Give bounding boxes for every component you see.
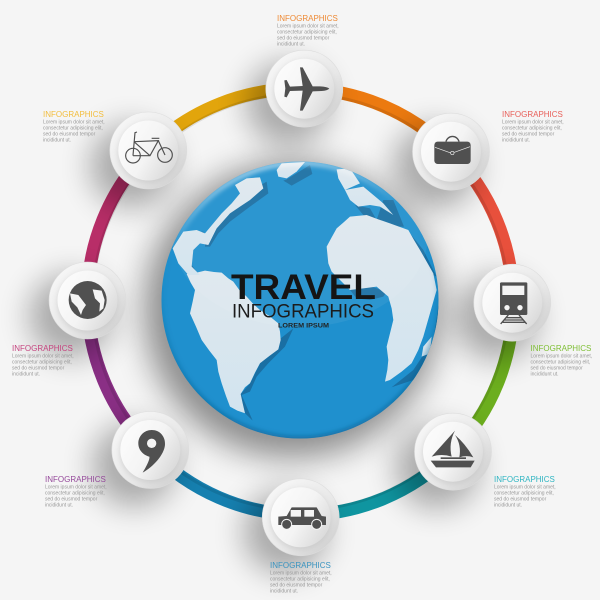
text block: left — [12, 344, 74, 378]
text block: upper right: Lorem ipsum dolor sit amet, — [502, 120, 564, 126]
text block: lower left: incididunt ut. — [45, 502, 73, 508]
madagascar — [422, 337, 432, 357]
text block: upper right — [502, 110, 564, 144]
text block: lower right: incididunt ut. — [494, 502, 522, 508]
text block: lower left — [45, 475, 107, 508]
text block: upper right: INFOGRAPHICS — [502, 110, 563, 119]
text block: bottom: Lorem ipsum dolor sit amet, — [270, 570, 332, 576]
coloured ring — [87, 89, 513, 515]
text block: upper left: incididunt ut. — [43, 138, 71, 144]
text block: upper left: consectetur adipisicing elit, — [43, 126, 103, 132]
europe — [337, 168, 393, 215]
text block: bottom: sed do eiusmod tempor — [270, 582, 323, 588]
globe shadow — [144, 162, 440, 458]
text block: right: INFOGRAPHICS — [530, 344, 591, 353]
text block: lower left: INFOGRAPHICS — [45, 475, 106, 484]
globe title: TRAVEL — [231, 268, 376, 307]
text block: upper left: sed do eiusmod tempor — [43, 132, 96, 138]
text block: right: consectetur adipisicing elit, — [530, 360, 590, 366]
africa — [327, 215, 437, 382]
icon: train — [500, 282, 527, 324]
node: world — [49, 262, 126, 339]
text block: upper right: incididunt ut. — [502, 138, 530, 144]
globe land — [173, 162, 437, 413]
text block: left: INFOGRAPHICS — [12, 344, 73, 353]
node: briefcase — [412, 113, 490, 190]
text block: right: incididunt ut. — [530, 372, 559, 378]
node: car — [262, 479, 339, 556]
text block: upper left — [43, 110, 105, 144]
icon: map pin — [138, 430, 165, 473]
icon: plane — [284, 67, 329, 111]
node: map pin — [112, 412, 189, 488]
icon: sailboat — [431, 431, 475, 467]
text block: bottom: incididunt ut. — [270, 588, 298, 594]
text block: bottom — [270, 561, 332, 594]
text block: lower right — [494, 475, 556, 508]
text block: lower left: consectetur adipisicing elit, — [45, 490, 105, 496]
text block: lower right: consectetur adipisicing elit, — [494, 490, 554, 496]
text block: right: sed do eiusmod tempor — [530, 366, 583, 372]
text block: lower right: Lorem ipsum dolor sit amet, — [494, 484, 556, 490]
text block: left: incididunt ut. — [12, 372, 40, 378]
node: train — [474, 264, 551, 341]
text block: top: sed do eiusmod tempor — [277, 36, 330, 42]
text block: lower right: sed do eiusmod tempor — [494, 496, 547, 502]
text block: top: Lorem ipsum dolor sit amet, — [277, 24, 339, 30]
node: plane — [266, 50, 343, 127]
globe land shadows — [179, 165, 443, 421]
text block: right — [530, 344, 592, 378]
globe title — [231, 268, 376, 330]
text block: right: Lorem ipsum dolor sit amet, — [530, 354, 592, 360]
south america — [187, 271, 281, 413]
icon: car — [278, 507, 326, 529]
text block: upper left: Lorem ipsum dolor sit amet, — [43, 120, 105, 126]
icon: briefcase — [434, 136, 471, 164]
text block: upper right: consectetur adipisicing elit, — [502, 126, 562, 132]
text block: bottom: INFOGRAPHICS — [270, 561, 331, 570]
text block: left: sed do eiusmod tempor — [12, 366, 65, 372]
text block: lower right: INFOGRAPHICS — [494, 475, 555, 484]
text block: left: Lorem ipsum dolor sit amet, — [12, 354, 74, 360]
globe title: INFOGRAPHICS — [232, 301, 374, 322]
text block: top: incididunt ut. — [277, 42, 305, 48]
icon: bicycle — [126, 132, 172, 163]
icon: world — [69, 281, 107, 319]
text block: bottom: consectetur adipisicing elit, — [270, 576, 330, 582]
glass highlight — [173, 162, 427, 327]
text block: top: consectetur adipisicing elit, — [277, 30, 337, 36]
node: bicycle — [110, 112, 187, 189]
node shadows — [29, 62, 538, 574]
globe title: LOREM IPSUM — [278, 323, 329, 330]
text block: upper left: INFOGRAPHICS — [43, 110, 104, 119]
north america — [173, 177, 263, 275]
text block: top — [277, 14, 339, 48]
text block: top: INFOGRAPHICS — [277, 14, 338, 23]
text block: left: consectetur adipisicing elit, — [12, 360, 72, 366]
text block: lower left: Lorem ipsum dolor sit amet, — [45, 484, 107, 490]
text block: upper right: sed do eiusmod tempor — [502, 132, 555, 138]
greenland — [277, 162, 305, 178]
node: sailboat — [414, 413, 492, 490]
globe — [161, 143, 443, 439]
text block: lower left: sed do eiusmod tempor — [45, 496, 98, 502]
